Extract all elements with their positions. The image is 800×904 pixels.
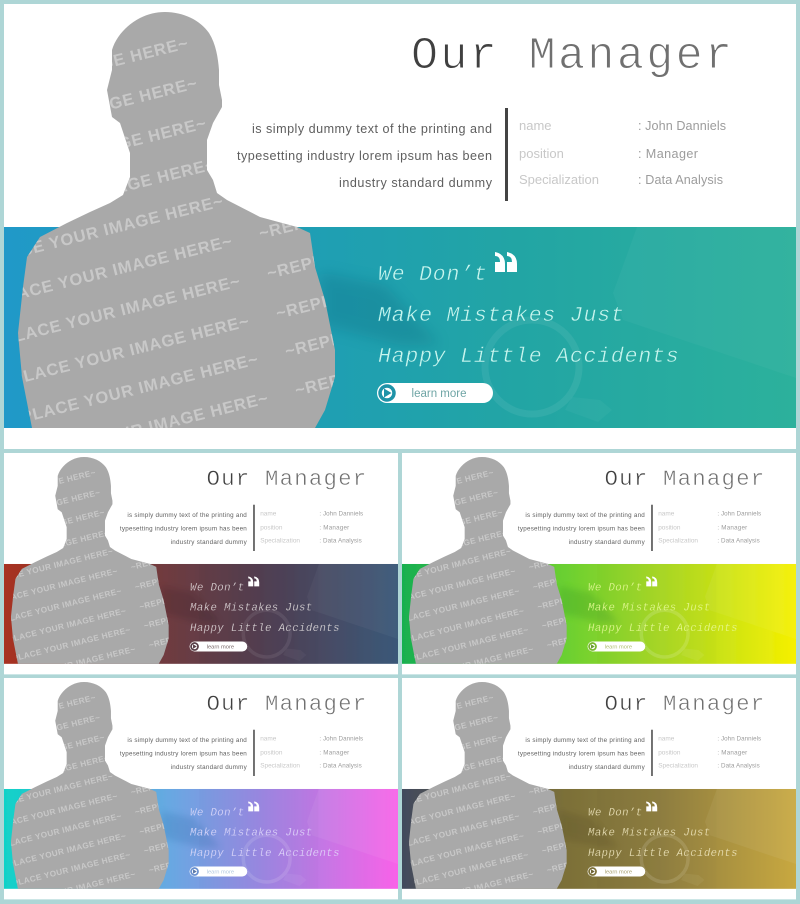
silhouette placeholder: ~REPLACE (125, 757, 173, 777)
button: learn more: learn more (605, 870, 632, 876)
title: Our Manager (411, 31, 734, 82)
silhouette placeholder: ~REPLACE YOUR IMAGE HERE~ (358, 693, 495, 735)
silhouette placeholder: ~REPLACE (130, 552, 178, 572)
silhouette placeholder: ~REPLACE (122, 513, 170, 534)
detail list (260, 511, 363, 545)
quote text: Happy Little Accidents (378, 345, 679, 369)
description text: industry standard dummy (569, 764, 646, 771)
detail list: : Manager (638, 147, 698, 161)
silhouette placeholder: ~REPLACE (515, 718, 563, 738)
detail list: position (658, 750, 681, 757)
silhouette placeholder: ~REPLACE YOUR IMAGE HERE~ (393, 850, 530, 892)
description text: typesetting industry lorem ipsum has been (120, 526, 247, 533)
silhouette placeholder: ~REPLACE YOUR IMAGE HERE~ (380, 792, 517, 834)
silhouette placeholder: ~REPLACE (523, 757, 571, 777)
silhouette placeholder: ~REPLACE (248, 163, 345, 203)
description text: is simply dummy text of the printing and (525, 737, 645, 744)
silhouette placeholder: ~REPLACE (546, 630, 594, 650)
quote text (588, 582, 738, 635)
detail list (519, 118, 726, 187)
detail list: Specialization (260, 763, 300, 770)
silhouette placeholder: ~REPLACE (274, 283, 371, 323)
detail list: : Data Analysis (717, 538, 760, 545)
title: Our Manager (206, 466, 367, 492)
quote text: Happy Little Accidents (190, 623, 340, 635)
detail list: : Manager (717, 750, 747, 757)
description text: typesetting industry lorem ipsum has been (518, 526, 645, 533)
band: green quote banner (402, 564, 796, 664)
silhouette placeholder: ~REPLACE YOUR IMAGE HERE~ (384, 586, 521, 629)
detail list: : Data Analysis (319, 538, 362, 545)
detail list: : John Danniels (638, 119, 726, 133)
silhouette placeholder: ~REPLACE (257, 203, 354, 243)
silhouette placeholder (11, 682, 169, 889)
silhouette placeholder: ~REPLACE YOUR IMAGE HERE~ (372, 753, 508, 795)
silhouette placeholder: ~REPLACE YOUR IMAGE HERE~ (376, 772, 512, 814)
detail list: : Manager (319, 750, 349, 757)
divider bar (253, 730, 255, 776)
detail list: name (260, 511, 277, 518)
quote text (190, 582, 340, 635)
detail list: name (658, 736, 675, 743)
divider bar (505, 108, 508, 201)
description text: industry standard dummy (171, 539, 248, 546)
quote text: We Don’t (378, 263, 488, 287)
quote text: We Don’t (190, 582, 245, 594)
silhouette placeholder: ~REPLACE (528, 552, 576, 572)
panel: violet slide (0, 678, 398, 904)
button: learn more: learn more (412, 388, 466, 400)
silhouette placeholder: ~REPLACE (546, 855, 594, 875)
title: Our Manager (604, 466, 765, 492)
silhouette placeholder: ~REPLACE YOUR IMAGE HERE~ (0, 389, 270, 474)
silhouette placeholder: ~REPLACE YOUR IMAGE HERE~ (363, 713, 499, 755)
silhouette placeholder: ~REPLACE (117, 718, 165, 738)
band: maroon quote banner (4, 564, 398, 664)
silhouette placeholder: ~REPLACE (515, 493, 563, 513)
silhouette placeholder (10, 457, 169, 664)
detail list: Specialization (519, 172, 599, 187)
quote text: We Don’t (190, 807, 245, 819)
detail list: position (260, 750, 283, 757)
detail list: name (519, 118, 552, 133)
silhouette placeholder: ~REPLACE (117, 493, 165, 513)
quote text (588, 807, 738, 860)
silhouette placeholder: ~REPLACE (213, 5, 310, 45)
description text (518, 737, 646, 771)
quote text: Happy Little Accidents (190, 848, 340, 860)
silhouette placeholder: ~REPLACE YOUR IMAGE HERE~ (376, 547, 512, 589)
description text: industry standard dummy (339, 176, 493, 190)
silhouette placeholder: ~REPLACE (130, 777, 178, 797)
band: teal quote banner (4, 227, 796, 428)
silhouette placeholder: ~REPLACE (506, 453, 554, 473)
quote text: Make Mistakes Just (588, 828, 711, 840)
description text: typesetting industry lorem ipsum has been (237, 149, 492, 163)
quote text: We Don’t (588, 582, 643, 594)
button: learn more (190, 867, 247, 876)
silhouette placeholder: ~REPLACE (148, 630, 196, 650)
silhouette placeholder: ~REPLACE (143, 610, 191, 631)
silhouette placeholder: ~REPLACE (113, 473, 161, 493)
button: learn more: learn more (207, 870, 234, 876)
silhouette placeholder: ~REPLACE YOUR IMAGE HERE~ (384, 811, 521, 854)
button: learn more (588, 642, 645, 651)
detail list: position (519, 146, 564, 161)
description text: industry standard dummy (569, 539, 646, 546)
silhouette placeholder: ~REPLACE (138, 817, 186, 837)
panel: main teal slide (0, 4, 796, 474)
band: gold quote banner (402, 789, 796, 889)
divider bar (651, 730, 653, 776)
silhouette placeholder: ~REPLACE (143, 835, 191, 856)
button: learn more (377, 383, 493, 403)
silhouette placeholder: ~REPLACE (506, 678, 554, 698)
silhouette placeholder: ~REPLACE YOUR IMAGE HERE~ (367, 508, 504, 550)
silhouette placeholder: ~REPLACE (113, 698, 161, 718)
silhouette placeholder: ~REPLACE YOUR IMAGE HERE~ (0, 645, 137, 687)
detail list: Specialization (658, 763, 698, 770)
button: learn more: learn more (207, 645, 234, 651)
detail list: name (658, 511, 675, 518)
silhouette placeholder: ~REPLACE (148, 855, 196, 875)
detail list: position (260, 525, 283, 532)
silhouette placeholder: ~REPLACE YOUR IMAGE HERE~ (398, 645, 535, 687)
quote text: Happy Little Accidents (588, 623, 738, 635)
detail list: : Data Analysis (717, 763, 760, 770)
silhouette placeholder: ~REPLACE (528, 777, 576, 797)
silhouette placeholder: ~REPLACE (293, 360, 390, 400)
button: learn more (588, 867, 645, 876)
detail list: : John Danniels (717, 736, 761, 743)
description text (120, 737, 248, 771)
silhouette placeholder: ~REPLACE (222, 45, 319, 85)
description text: typesetting industry lorem ipsum has been (120, 751, 247, 758)
silhouette placeholder: ~REPLACE YOUR IMAGE HERE~ (358, 468, 495, 510)
detail list: : Data Analysis (319, 763, 362, 770)
silhouette placeholder: ~REPLACE YOUR IMAGE HERE~ (380, 567, 517, 609)
silhouette placeholder (409, 682, 567, 889)
silhouette placeholder: ~REPLACE (536, 592, 584, 612)
panel: green slide (402, 453, 796, 674)
silhouette placeholder: ~REPLACE YOUR IMAGE HERE~ (367, 733, 504, 775)
panel: gold slide (402, 678, 796, 900)
quote text: Make Mistakes Just (378, 304, 625, 328)
silhouette placeholder: ~REPLACE (125, 532, 173, 552)
detail list: : Manager (717, 525, 747, 532)
silhouette placeholder: ~REPLACE (265, 243, 362, 283)
silhouette placeholder: ~REPLACE (541, 835, 589, 856)
silhouette placeholder: ~REPLACE (511, 473, 559, 493)
silhouette placeholder: ~REPLACE (108, 678, 156, 698)
silhouette placeholder: ~REPLACE YOUR IMAGE HERE~ (388, 831, 525, 874)
button: learn more (190, 642, 247, 651)
quote text: Make Mistakes Just (588, 603, 711, 615)
silhouette placeholder: ~REPLACE (108, 453, 156, 473)
icon: quotation mark (646, 801, 657, 811)
detail list: Specialization (260, 538, 300, 545)
silhouette placeholder: ~REPLACE YOUR IMAGE HERE~ (393, 625, 530, 667)
band: violet quote banner (4, 789, 398, 889)
detail list: Specialization (658, 538, 698, 545)
panel: maroon slide (0, 453, 398, 687)
quote text: Happy Little Accidents (588, 848, 738, 860)
icon: quotation mark (495, 252, 517, 272)
silhouette placeholder: ~REPLACE YOUR IMAGE HERE~ (388, 606, 525, 649)
description text (120, 512, 248, 546)
silhouette placeholder: ~REPLACE (532, 572, 580, 592)
detail list: position (658, 525, 681, 532)
silhouette placeholder: ~REPLACE (511, 698, 559, 718)
silhouette placeholder: ~REPLACE (523, 532, 571, 552)
silhouette placeholder (18, 12, 335, 428)
title: Our Manager (604, 691, 765, 717)
silhouette placeholder: ~REPLACE (231, 85, 328, 125)
divider bar (651, 505, 653, 551)
quote text: Make Mistakes Just (190, 603, 313, 615)
icon: quotation mark (646, 576, 657, 586)
description text: is simply dummy text of the printing and (127, 512, 247, 519)
description text: industry standard dummy (171, 764, 248, 771)
detail list: name (260, 736, 277, 743)
description text (518, 512, 646, 546)
silhouette placeholder: ~REPLACE YOUR IMAGE HERE~ (363, 488, 499, 530)
detail list: : Manager (319, 525, 349, 532)
detail list: : John Danniels (319, 511, 363, 518)
silhouette placeholder: ~REPLACE (138, 592, 186, 612)
silhouette placeholder: ~REPLACE (532, 797, 580, 817)
icon: quotation mark (248, 801, 259, 811)
silhouette placeholder: ~REPLACE (134, 797, 182, 817)
description text: is simply dummy text of the printing and (252, 122, 492, 136)
quote text: Make Mistakes Just (190, 828, 313, 840)
silhouette placeholder: ~REPLACE (520, 738, 568, 759)
silhouette placeholder: ~REPLACE (541, 610, 589, 631)
silhouette placeholder (408, 457, 567, 664)
quote text (378, 263, 679, 369)
detail list: : John Danniels (319, 736, 363, 743)
description text: typesetting industry lorem ipsum has been (518, 751, 645, 758)
silhouette placeholder: ~REPLACE (122, 738, 170, 759)
divider bar (253, 505, 255, 551)
silhouette placeholder: ~REPLACE (536, 817, 584, 837)
description text: is simply dummy text of the printing and (525, 512, 645, 519)
description text: is simply dummy text of the printing and (127, 737, 247, 744)
icon: quotation mark (248, 576, 259, 586)
quote text: We Don’t (588, 807, 643, 819)
button: learn more: learn more (605, 645, 632, 651)
title: Our Manager (206, 691, 367, 717)
detail list (260, 736, 363, 770)
silhouette placeholder: ~REPLACE YOUR IMAGE HERE~ (372, 528, 508, 570)
silhouette placeholder: ~REPLACE (520, 513, 568, 534)
description text (237, 122, 493, 190)
silhouette placeholder: ~REPLACE (134, 572, 182, 592)
quote text (190, 807, 340, 860)
silhouette placeholder: ~REPLACE (283, 321, 380, 361)
detail list: : Data Analysis (638, 173, 723, 187)
silhouette placeholder: ~REPLACE (240, 126, 337, 166)
detail list (658, 511, 761, 545)
detail list: : John Danniels (717, 511, 761, 518)
detail list (658, 736, 761, 770)
